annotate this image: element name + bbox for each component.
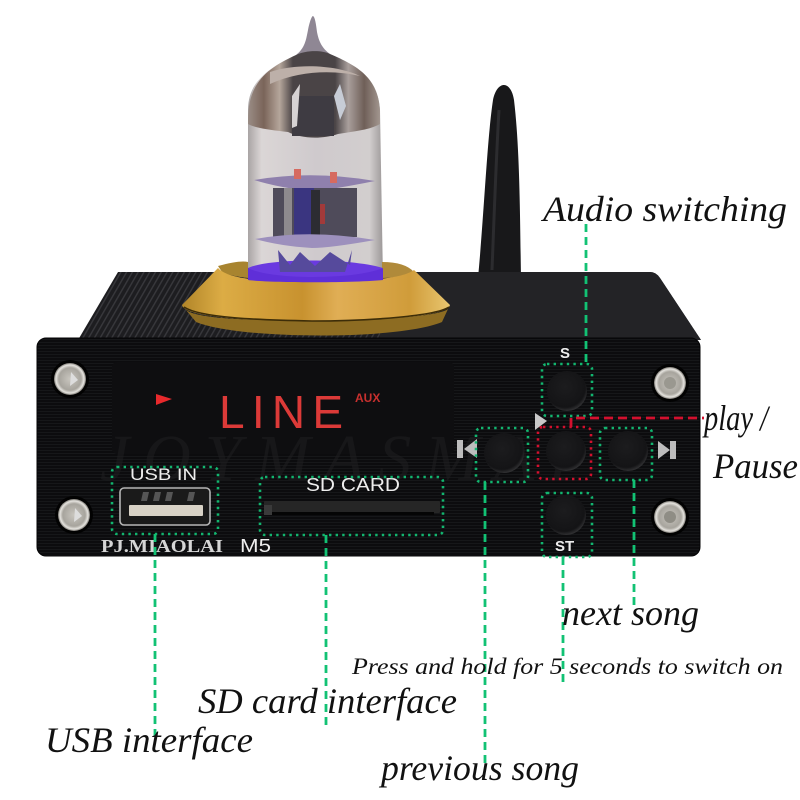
label: SD card interface: SD card interface <box>198 681 457 721</box>
front panel <box>37 338 700 556</box>
button ST <box>546 495 586 535</box>
leader: USB <box>154 534 156 736</box>
button label ST: ST <box>555 538 574 555</box>
label: play: play / <box>702 398 770 438</box>
callout box: previous <box>476 428 528 482</box>
leader: audio switching <box>585 224 587 364</box>
gold tube base <box>182 262 450 336</box>
leader: ST <box>562 557 564 682</box>
label: next song: next song <box>562 593 699 633</box>
screw top right <box>651 364 689 402</box>
vacuum tube <box>248 16 383 280</box>
brand text: PJ.MIAOLAI <box>101 536 223 556</box>
callout box: play <box>538 427 591 479</box>
button previous <box>484 433 524 473</box>
icon: play <box>535 413 547 430</box>
watermark: JOYMASMAI <box>100 422 573 495</box>
tube upper mica disc <box>254 175 375 191</box>
leader: previous <box>484 482 486 766</box>
button play <box>546 431 586 471</box>
tube glass body <box>248 54 383 280</box>
display text LINE: LINE <box>219 386 343 438</box>
screw bottom left <box>55 496 93 534</box>
button label S: S <box>560 345 570 362</box>
tube plate structure <box>273 188 357 237</box>
tube getter mirror <box>248 51 380 138</box>
screw top left <box>51 360 89 398</box>
amplifier chassis top face <box>78 272 701 340</box>
display text AUX: AUX <box>355 391 380 405</box>
tube lower mica disc <box>255 234 375 248</box>
USB port: USB IN <box>130 465 197 484</box>
SD card slot: SD CARD <box>306 475 400 495</box>
leader: next <box>633 480 635 606</box>
leader: SD <box>325 535 327 726</box>
label: USB interface: USB interface <box>45 720 253 760</box>
icon: next <box>658 441 676 459</box>
callout box: SD <box>260 477 443 535</box>
tube tip <box>296 16 330 55</box>
callout box: ST <box>542 493 592 557</box>
display window <box>112 362 454 454</box>
model text: M5 <box>240 536 271 556</box>
callout box: S <box>542 364 592 416</box>
label: press and hold: Press and hold for 5 seconds to switch on <box>351 654 783 679</box>
callout box: USB <box>112 467 218 534</box>
leader: play <box>571 418 704 427</box>
button S <box>547 371 587 411</box>
icon: antenna <box>478 85 521 278</box>
button next <box>608 431 648 471</box>
label: Audio switching: Audio switching <box>541 189 787 229</box>
tube red dots <box>294 169 301 179</box>
callout box: next <box>600 428 652 480</box>
screw bottom right <box>651 498 689 536</box>
display play icon <box>156 394 172 405</box>
label: Pause: Pause <box>712 446 798 486</box>
icon: previous <box>457 439 477 458</box>
label: previous song: previous song <box>378 748 579 788</box>
tube blue glow <box>248 260 383 280</box>
USB port <box>120 465 210 525</box>
SD card slot <box>264 475 440 515</box>
